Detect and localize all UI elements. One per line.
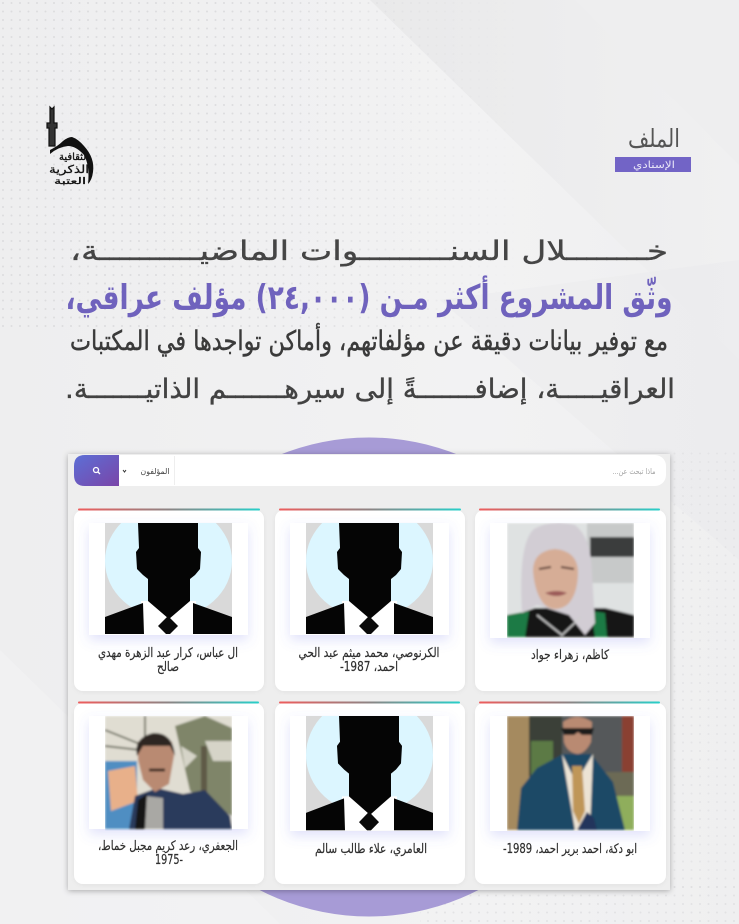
purple circle behind screenshot bbox=[130, 438, 608, 916]
card: Karnousi bbox=[275, 504, 465, 691]
card: Al Abbas bbox=[74, 504, 264, 691]
logo: minaret and dome calligraphy: العتبة bbox=[54, 177, 86, 187]
dropdown: المؤلفون bbox=[140, 467, 170, 476]
name: الجعفري، رعد كريم مجبل خماط، bbox=[98, 839, 238, 854]
silhouette placeholder bbox=[306, 504, 433, 636]
name: كاظم، زهراء جواد bbox=[531, 648, 610, 663]
name bbox=[98, 646, 238, 675]
card: Al Jaafari bbox=[74, 702, 264, 884]
line 1: خــــــــلال السنـــــــــوات الماضيــــــــــة، bbox=[70, 236, 668, 267]
line 4: العراقيـــــة، إضافـــــــةً إلى سيرهـــــــم الذاتيـــــــة. bbox=[65, 374, 675, 405]
search button bbox=[74, 455, 119, 486]
logo: minaret and dome calligraphy: الذكرية bbox=[49, 163, 89, 176]
search icon bbox=[94, 468, 100, 474]
card: Al Amiri bbox=[275, 696, 465, 884]
name: ال عباس، كرار عبد الزهرة مهدي bbox=[98, 646, 238, 661]
silhouette placeholder bbox=[105, 504, 232, 636]
website screenshot panel bbox=[68, 454, 670, 890]
name: ابو دكة، احمد برير احمد، 1989- bbox=[503, 842, 637, 857]
section label bbox=[615, 124, 691, 172]
name bbox=[98, 839, 238, 868]
name: العامري، علاء طالب سالم bbox=[315, 842, 427, 857]
name: 1975- bbox=[155, 853, 183, 868]
section title: الملف bbox=[628, 124, 680, 153]
logo: minaret and dome calligraphy bbox=[47, 107, 93, 187]
silhouette placeholder bbox=[306, 696, 433, 832]
photo: man in blue suit bbox=[507, 716, 634, 830]
search bar bbox=[74, 455, 666, 486]
name: احمد، 1987- bbox=[340, 660, 398, 675]
name: صالح bbox=[157, 660, 179, 675]
card: Kazim bbox=[475, 508, 666, 691]
dropdown bbox=[123, 456, 175, 485]
photo: man with palm trees bbox=[105, 716, 232, 829]
photo: woman in white hijab bbox=[507, 523, 634, 637]
section badge: الإسنادي bbox=[633, 160, 675, 171]
card: Abu Dakka bbox=[475, 702, 666, 884]
headline text block bbox=[65, 236, 675, 405]
name: الكرنوصي، محمد ميثم عبد الحي bbox=[298, 646, 440, 661]
logo: minaret and dome calligraphy: الثقافية bbox=[59, 152, 89, 163]
search placeholder: ماذا تبحث عن... bbox=[612, 467, 656, 476]
name bbox=[298, 646, 440, 675]
